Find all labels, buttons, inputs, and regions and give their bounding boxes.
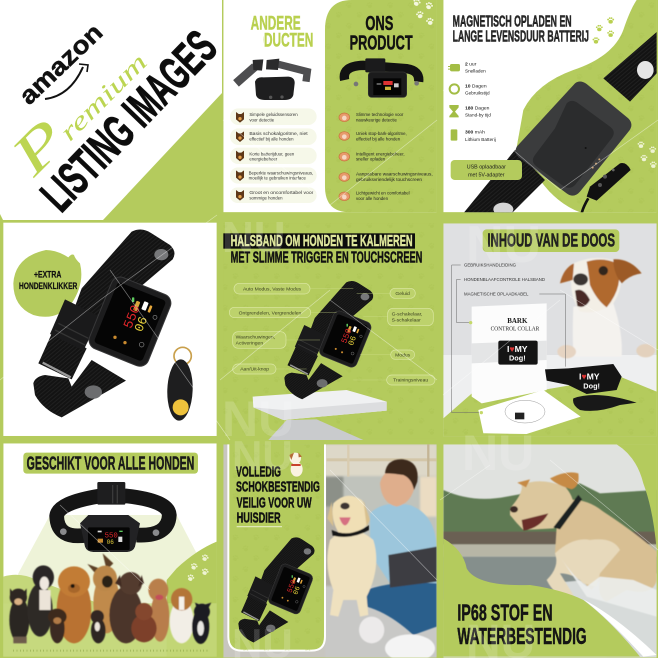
labels: collar feature callouts: Modus <box>395 352 411 358</box>
panel: andere producten vs ons product <box>223 0 437 212</box>
watermark: NU <box>222 213 541 658</box>
list: ons product voordelen: sneller opladen <box>356 157 386 162</box>
image: collar with touchscreen <box>238 537 315 642</box>
list: battery specs: 2 uur <box>465 62 477 68</box>
heading: ip68 stof en waterbestendig: IP68 STOF EN <box>457 600 553 626</box>
icon: charge <box>448 64 460 71</box>
icon: stopwatch <box>450 84 459 94</box>
list: battery specs: Snelladen <box>465 69 486 74</box>
image: collar front view: 550 <box>105 532 118 540</box>
image: collar front view: 06 <box>107 539 114 546</box>
labels: collar feature callouts: Ontgrendelen, Vergrendelen <box>239 310 302 316</box>
heading: ons product <box>350 16 413 50</box>
watermark: NU: NU <box>466 216 541 274</box>
list: andere producten nadelen: voor detectie <box>249 117 275 122</box>
heading: volledig schokbestendig veilig voor uw huisdier: HUISDIER <box>237 511 281 527</box>
image: collar with touchscreen: 06 <box>347 335 359 347</box>
icon: shiba <box>9 588 29 643</box>
image: collar with touchscreen <box>33 230 174 417</box>
image: product box: CONTROL COLLAR <box>491 326 540 333</box>
list: battery specs: Stand-by tijd <box>465 112 491 117</box>
heading: volledig schokbestendig veilig voor uw huisdier: SCHOKBESTENDIG <box>236 480 320 496</box>
list: andere producten nadelen: Simpele geluidssensoren <box>249 112 298 117</box>
image: dog clicker <box>166 347 194 421</box>
image: instruction paper <box>478 390 581 434</box>
labels: collar feature callouts: S-schakelaar <box>392 318 421 324</box>
callout: extra hondenklikker <box>13 250 81 317</box>
icon: paw prints <box>593 17 657 168</box>
labels: box contents <box>452 263 565 413</box>
watermark: NU: NU <box>232 432 293 479</box>
labels: collar feature callouts: Auto Modus, Vaste Modus <box>243 286 302 292</box>
image: product box: Dog! <box>509 354 526 363</box>
labels: collar feature callouts: Trainingsniveau <box>393 378 428 384</box>
callout: extra hondenklikker: HONDENKLIKKER <box>19 281 78 291</box>
list: ons product voordelen <box>339 112 433 201</box>
list: ons product voordelen: Lichtgewicht en comfortabel <box>356 191 410 196</box>
heading: volledig schokbestendig veilig voor uw huisdier <box>236 465 320 527</box>
heading: ip68 stof en waterbestendig <box>457 600 587 649</box>
list: ons product voordelen: effectief bij alle honden <box>356 136 401 141</box>
image: collar with touchscreen <box>284 281 373 399</box>
labels: collar feature callouts: Aan/Uit-knop <box>240 367 269 373</box>
watermark: NU: NU <box>222 391 294 447</box>
image: collar front view <box>57 482 169 552</box>
image: product box: BARK <box>507 317 528 325</box>
panel: amazon premium listing images cover <box>0 0 227 221</box>
image: collar with touchscreen: 550 <box>287 579 299 594</box>
list: andere producten nadelen: Korte batterijduur, geen <box>249 151 295 156</box>
icon: cartoon dog <box>289 453 303 477</box>
labels: collar feature callouts: Waarschuwingen, <box>236 334 275 340</box>
heading: geschikt voor alle honden <box>23 452 198 474</box>
decoration: height ruler <box>13 648 210 654</box>
icon: french bulldog <box>192 603 211 644</box>
image: collar strap with charging side <box>463 31 658 216</box>
list: ons product voordelen: voor alle honden <box>356 196 389 201</box>
image: collar with touchscreen: 06 <box>131 314 151 334</box>
panel: ip68 stof en waterbestendig <box>443 444 657 658</box>
text: premium script: Premium <box>0 29 158 188</box>
list: andere producten nadelen: moeilijk te gebruiken interface <box>249 176 307 181</box>
callout: extra hondenklikker: +EXTRA <box>34 270 62 280</box>
image: jack russell dog <box>557 258 655 358</box>
image: product box: I♥MY <box>507 344 528 354</box>
callout: usb oplaadbaar <box>451 160 522 180</box>
image: ons product collar <box>344 58 419 97</box>
icon: staffy <box>148 579 169 642</box>
icon: chocolate labrador <box>109 572 144 643</box>
icon: battery <box>451 129 457 141</box>
icon: small dachshund pup <box>48 609 67 643</box>
list: andere producten nadelen: sommige honden <box>249 195 283 200</box>
list: andere producten nadelen <box>230 108 317 203</box>
image: water and trees photo <box>443 444 657 658</box>
image: collar with touchscreen: 550 <box>339 327 354 345</box>
heading: halsband om honden te kalmeren: HALSBAND OM HONDEN TE KALMEREN <box>231 233 413 250</box>
labels: collar feature callouts <box>229 283 435 385</box>
icon: labrador <box>327 496 376 617</box>
image: magnetic charging cable <box>582 163 631 213</box>
heading: magnetisch opladen: MAGNETISCH OPLADEN EN <box>453 14 572 31</box>
list: battery specs: Gebruikstijd <box>465 90 490 95</box>
image: collar front and cable <box>545 364 637 411</box>
labels: box contents: HONDENBLAAFCONTROLE HALSBAND <box>464 277 545 282</box>
list: andere producten nadelen: Beperkte waarschuwingsniveaus, <box>249 170 313 175</box>
labels: box contents: MAGNETISCHE OPLAADKABEL <box>464 291 529 296</box>
shape: green blobs <box>443 444 657 657</box>
heading: andere producten: PRODUCTEN <box>238 31 313 52</box>
list: ons product voordelen: Slimme technologie voor <box>356 112 404 117</box>
list: andere producten nadelen: Groot en oncomfortabel voor <box>249 190 314 195</box>
image: collar front and cable: Dog! <box>583 381 600 390</box>
list: battery specs: 10 Dagen <box>465 83 487 89</box>
heading: halsband om honden te kalmeren <box>223 233 422 267</box>
image: product box <box>469 303 547 403</box>
list: battery specs: Lithium Batterij <box>465 137 496 142</box>
labels: collar feature callouts: G-schakelaar, <box>392 311 422 317</box>
heading: halsband om honden te kalmeren: MET SLIMME TRIGGER EN TOUCHSCREEN <box>231 250 422 267</box>
icon: german shepherd <box>87 553 120 633</box>
icon: paw prints <box>412 0 434 25</box>
icon: chow chow <box>57 566 91 643</box>
list: andere producten nadelen: energiebeheer <box>249 157 278 162</box>
list: battery specs: 180 Dagen <box>465 105 490 111</box>
image: group of dogs <box>9 553 211 644</box>
panel: volledig schokbestendig <box>223 437 437 658</box>
list: battery specs <box>448 62 496 142</box>
icon: boxer <box>27 565 54 637</box>
list: ons product voordelen: Uniek stop-bark-algoritme, <box>356 131 407 136</box>
image: jumping labrador <box>510 472 657 617</box>
image: collar front and cable: I♥MY <box>579 371 600 381</box>
heading: ons product: PRODUCT <box>350 31 413 54</box>
panel: hondenklikker <box>3 223 217 436</box>
panel: inhoud van de doos <box>443 223 657 437</box>
heading: magnetisch opladen <box>453 15 588 42</box>
icon: hourglass <box>449 105 459 117</box>
list: ons product voordelen: nauwkeurige detectie <box>356 117 397 122</box>
image: collar with touchscreen: 550 <box>122 303 145 331</box>
callout: usb oplaadbaar: met 5V-adapter <box>468 173 505 179</box>
panel: green text card <box>228 437 325 651</box>
image: generic collar <box>236 59 307 100</box>
icon: poodle <box>131 603 157 642</box>
heading: andere producten: ANDERE <box>251 13 301 34</box>
watermark: NU: NU <box>222 213 286 262</box>
panel: geschikt voor alle honden <box>3 443 217 657</box>
text: amazon logo: amazon <box>14 18 108 110</box>
image: pedestal <box>253 390 387 440</box>
list: ons product voordelen: Aanpasbare waarschuwingsniveaus, <box>356 172 433 177</box>
heading: volledig schokbestendig veilig voor uw huisdier: VOLLEDIG <box>236 465 281 481</box>
list: ons product voordelen: Intelligent energiebeheer, <box>356 151 405 156</box>
icon: paw prints <box>186 554 209 582</box>
image: living room photo <box>325 443 437 658</box>
list: ons product voordelen: gebruiksvriendelijk touchscreen <box>356 177 423 182</box>
icon: beagle <box>170 588 194 643</box>
panel: halsband features <box>223 223 437 440</box>
icon: chihuahua <box>91 610 106 643</box>
labels: box contents: GEBRUIKSHANDLEIDING <box>464 263 517 268</box>
list: andere producten nadelen: Basis schokalgoritme, niet <box>249 131 309 136</box>
callout: usb oplaadbaar: USB oplaadbaar <box>467 164 506 170</box>
heading: andere producten <box>250 16 313 47</box>
labels: collar feature callouts: Geluid <box>395 291 410 297</box>
watermark: NU: NU <box>462 425 534 481</box>
image: collar with touchscreen: 06 <box>292 585 303 596</box>
heading: volledig schokbestendig veilig voor uw huisdier: VEILIG VOOR UW <box>237 496 312 512</box>
list: andere producten nadelen: effectief bij alle honden <box>249 136 294 141</box>
icon: man <box>359 459 437 658</box>
heading: ons product: ONS <box>365 12 393 35</box>
labels: collar feature callouts: Activeringen <box>236 341 263 347</box>
panel: magnetisch opladen <box>443 0 658 216</box>
list: battery specs: 300 mAh <box>465 129 485 135</box>
heading: geschikt voor alle honden: GESCHIKT VOOR ALLE HONDEN <box>27 452 194 473</box>
